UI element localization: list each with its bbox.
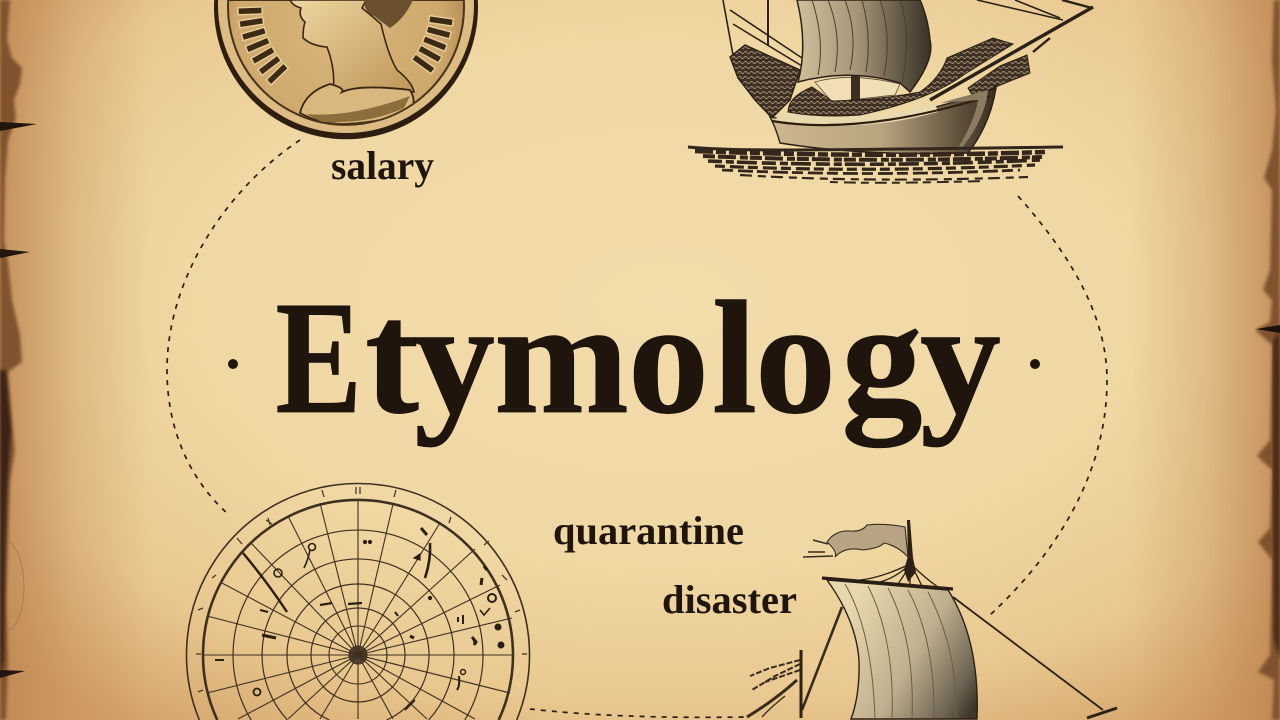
- title: tymology: [365, 269, 1001, 448]
- label: salary: salary: [331, 143, 434, 188]
- ship hull: [770, 88, 996, 154]
- star chart illustration: [186, 483, 530, 720]
- chart constellation marks: [215, 528, 504, 710]
- flag: [803, 524, 908, 557]
- large sail: [827, 580, 977, 719]
- chart spokes: [202, 499, 514, 719]
- sailing ship illustration, top right: [688, 0, 1093, 183]
- torn right edge: [1255, 0, 1280, 720]
- ship mast: [851, 74, 860, 102]
- ship deck mesh and crowd: [788, 38, 1013, 116]
- chart outer band glyphs: [196, 487, 527, 692]
- small mast: [800, 650, 802, 718]
- torn left edge: [0, 0, 37, 720]
- small pennant: [747, 660, 800, 717]
- decorative dot right: [1030, 359, 1040, 369]
- mast top: [904, 520, 916, 582]
- sail seams: [845, 584, 956, 718]
- decorative dot left: [228, 359, 238, 369]
- ship water lines: [688, 147, 1063, 183]
- ship rigging: [723, 0, 1093, 100]
- coin rim ticks right: [412, 16, 453, 74]
- forward spar: [802, 607, 842, 710]
- ship stern castle: [730, 45, 800, 118]
- label: disaster: disaster: [662, 577, 797, 622]
- coin rim ticks left: [238, 7, 288, 85]
- masthead rigging: [860, 565, 938, 587]
- dashed connecting circle: [167, 140, 1107, 717]
- stay end spar: [1087, 708, 1117, 718]
- viking ship illustration, bottom right: [747, 520, 1117, 719]
- ship bow castle: [968, 55, 1030, 100]
- yard: [822, 578, 953, 589]
- label: quarantine: quarantine: [553, 508, 744, 553]
- ship deck opening: [815, 77, 900, 102]
- coin illustration: [214, 0, 478, 139]
- rope stay: [953, 597, 1103, 710]
- coin portrait: [290, 0, 414, 124]
- title: E: [276, 269, 362, 448]
- ship sail: [797, 0, 931, 92]
